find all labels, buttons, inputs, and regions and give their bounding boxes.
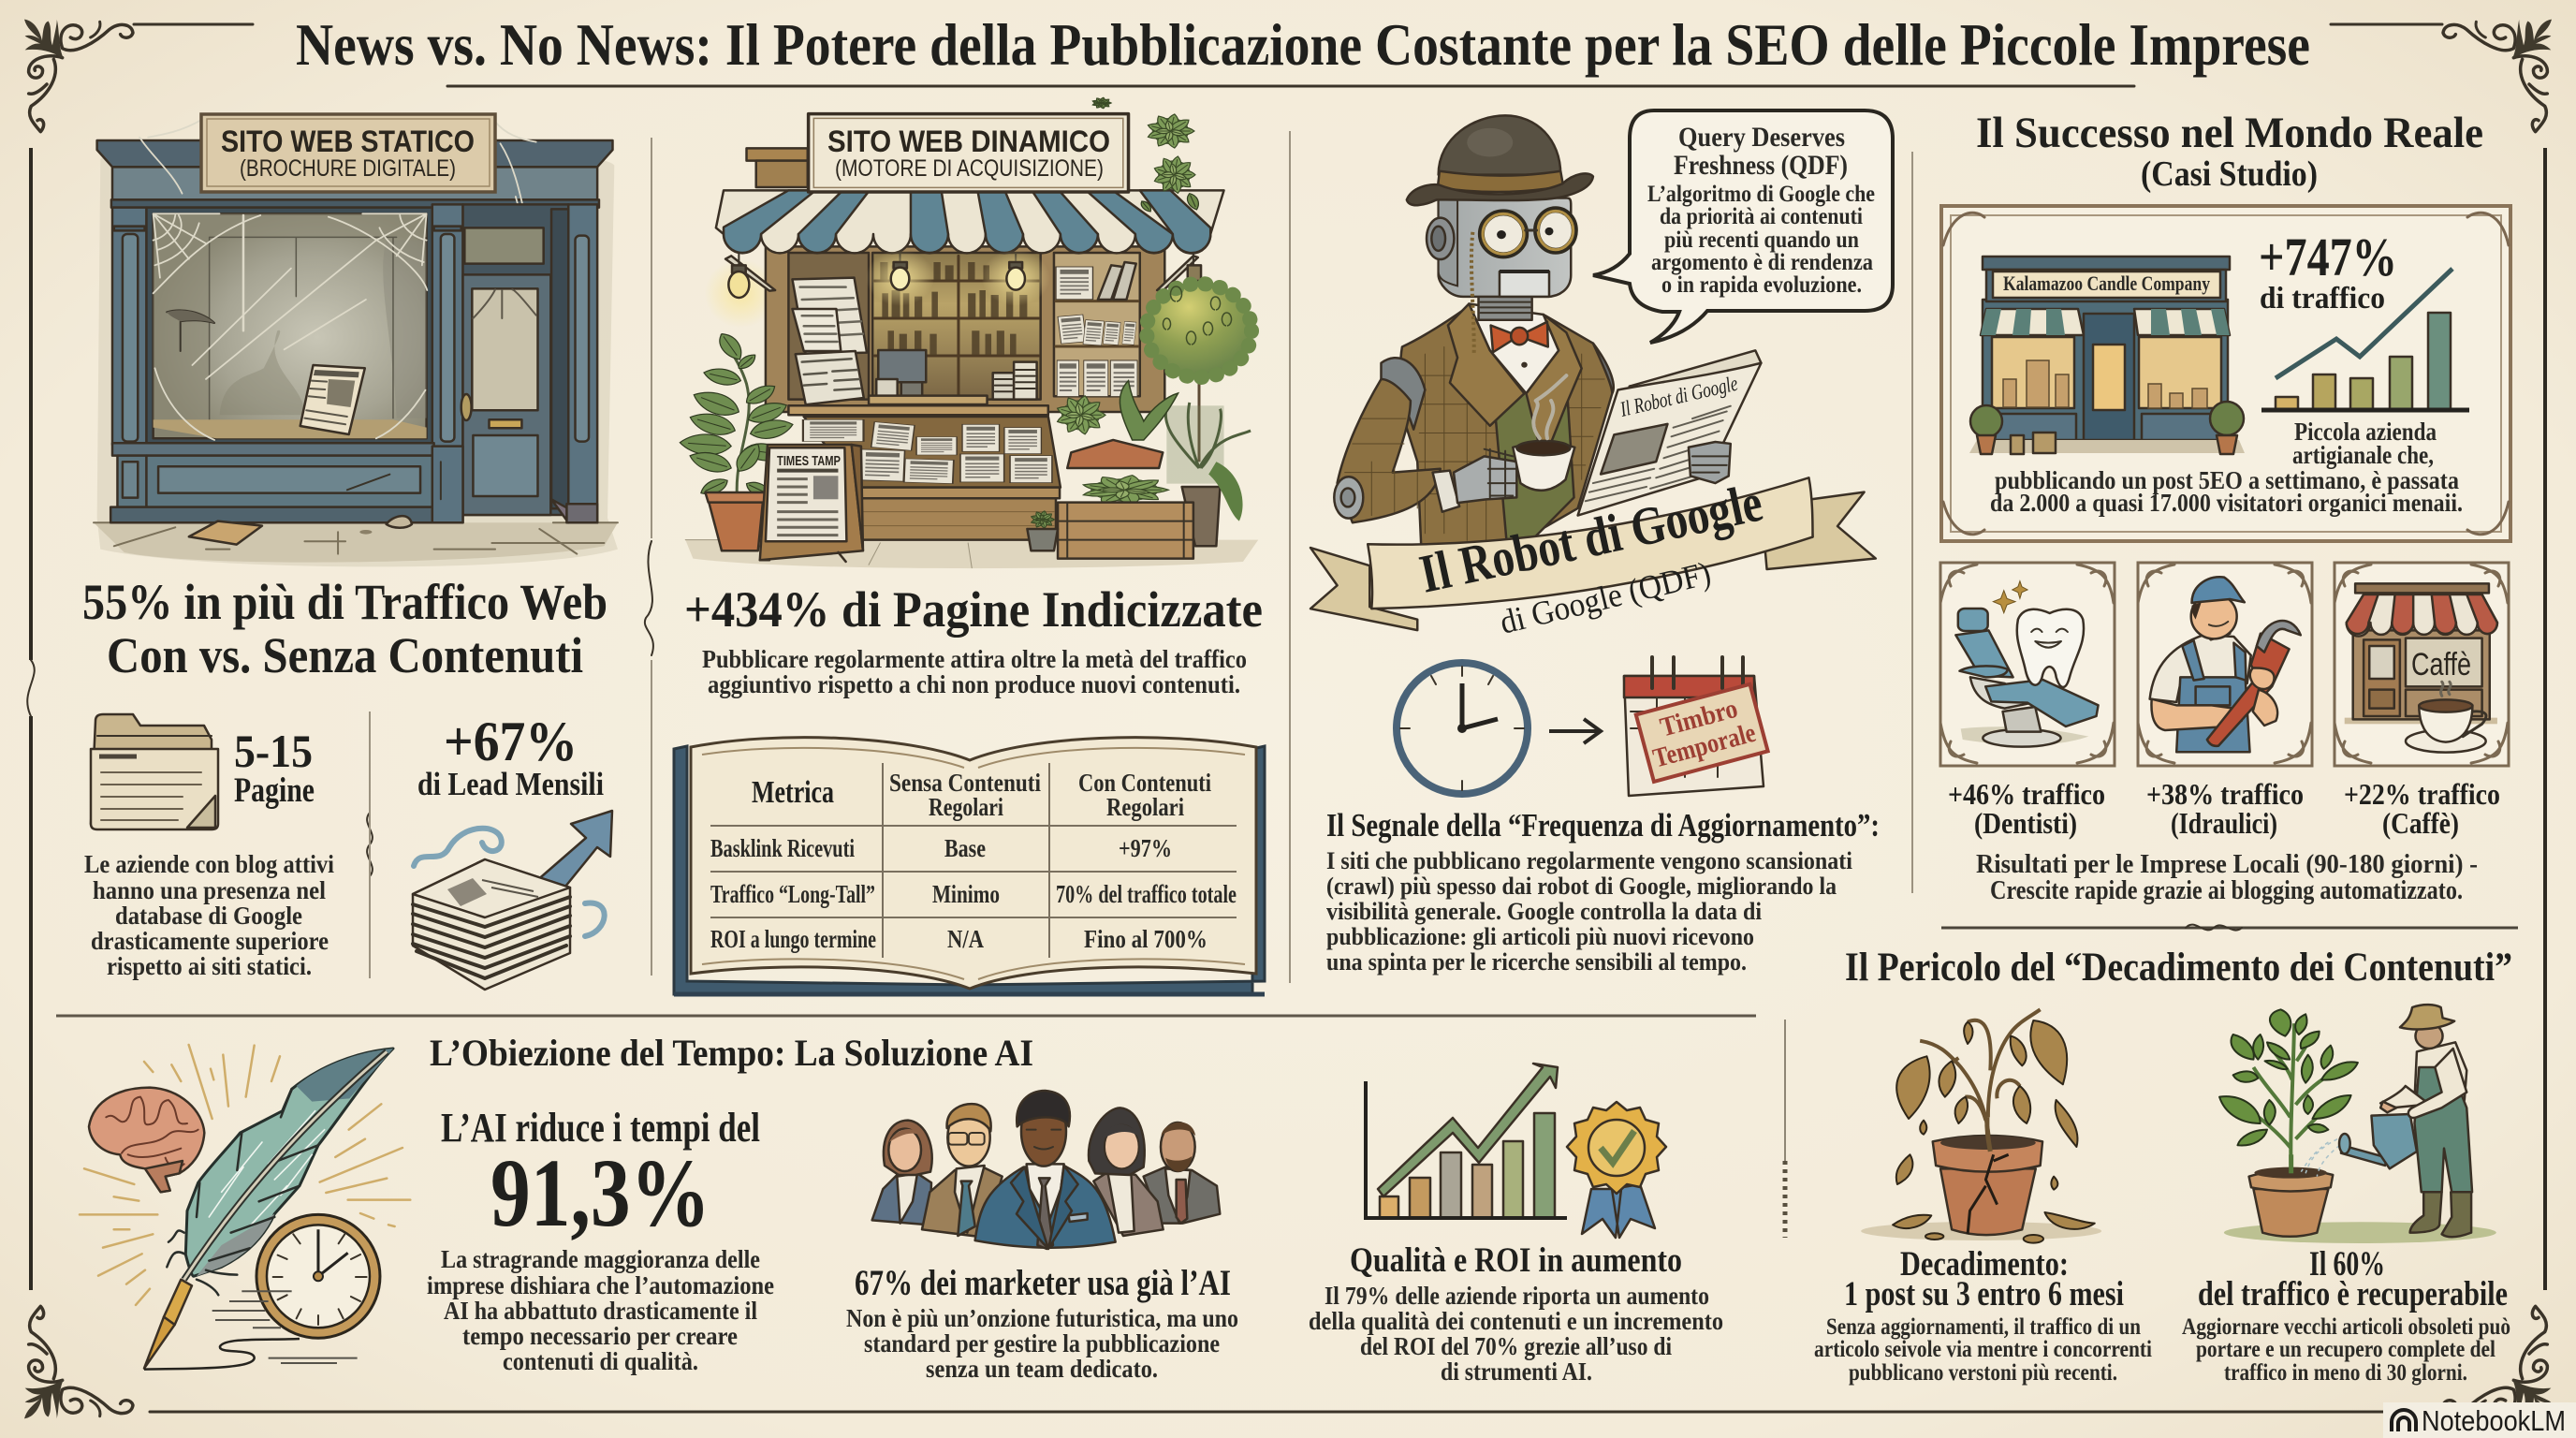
callout: QDF speech bubble — [1593, 110, 1893, 343]
panel: dynamic website — [674, 97, 1265, 994]
table rows: Traffico “Long-Tall” — [710, 880, 875, 908]
text: local business results — [1976, 850, 2478, 905]
icon: calendar with timestamp — [1624, 657, 1768, 796]
text: recovery explanation: portare e un recupero complete del — [2196, 1337, 2496, 1362]
sign: static website: (BROCHURE DIGITALE) — [240, 155, 456, 182]
illustration: group of marketers — [872, 1091, 1220, 1249]
text: kalamazoo result: Piccola azienda — [2294, 418, 2437, 446]
text: quality and ROI: della qualità dei contenuti e un incremento — [1309, 1307, 1723, 1335]
heading: real world success — [1976, 109, 2483, 194]
stat: recoverable — [2198, 1245, 2508, 1313]
text: automation — [427, 1245, 774, 1375]
panel: static website — [82, 114, 618, 990]
label: newspaper headline: Il Robot di Google — [1617, 372, 1740, 421]
title: News vs. No News: Il Potere della Pubblicazione Costante per la SEO delle Piccole Imprese — [296, 12, 2310, 78]
icon: calendar with timestamp: Timbro — [1657, 694, 1741, 742]
heading: 55% traffic: Con vs. Senza Contenuti — [107, 627, 583, 683]
illustration: robot reading newspaper — [1310, 115, 1876, 630]
labels: sector results — [1948, 777, 2500, 840]
text: AI standard: standard per gestire la pubblicazione — [864, 1329, 1220, 1357]
text: automation: La stragrande maggioranza delle — [441, 1245, 760, 1273]
illustration: candle shop: Kalamazoo Candle Company — [2003, 271, 2210, 295]
text: update frequency: una spinta per le ricerche sensibili al tempo. — [1326, 948, 1747, 976]
icon: quality medal — [1567, 1102, 1666, 1238]
table rows: +97% — [1119, 834, 1172, 862]
table rows — [710, 834, 1237, 953]
text: update frequency — [1326, 847, 1852, 976]
stat: +67% leads: +67% — [444, 711, 578, 772]
table rows: N/A — [947, 925, 984, 953]
text: blog presence: rispetto ai siti statici. — [107, 952, 312, 980]
heading: quality and ROI: Qualità e ROI in aumento — [1350, 1241, 1682, 1280]
text: update frequency: pubblicazione: gli articoli più nuovi ricevono — [1326, 923, 1754, 950]
text: automation: contenuti di qualità. — [503, 1347, 698, 1375]
label: times tamp board: TIMES TAMP — [777, 453, 841, 469]
illustration: busy newsstand — [685, 114, 1258, 568]
panel: case studies — [1940, 109, 2510, 905]
icon: paper stack with arrow — [413, 811, 612, 990]
stat: +67% leads: di Lead Mensili — [417, 766, 604, 802]
illustration: gardener watering plant — [2219, 1005, 2496, 1243]
stat: 5-15 pagine — [234, 725, 315, 810]
text: blog presence: drasticamente superiore — [91, 927, 329, 955]
card: cafe — [2334, 563, 2509, 766]
stat: decay: 1 post su 3 entro 6 mesi — [1844, 1275, 2124, 1313]
text: kalamazoo result: pubblicando un post 5EO a settimano, è passata — [1995, 466, 2459, 494]
stat: recoverable: Il 60% — [2309, 1245, 2385, 1284]
chart: quality and ROI — [1366, 1064, 1567, 1218]
text: recovery explanation — [2182, 1314, 2510, 1386]
text: regular publishing: aggiuntivo rispetto a chi non produce nuovi contenuti. — [708, 670, 1240, 698]
chart: traffic growth — [2261, 269, 2469, 410]
table rows: 70% del traffico totale — [1056, 880, 1237, 908]
sign: dynamic website: SITO WEB DINAMICO — [827, 125, 1110, 158]
text: local business results: Crescite rapide grazie ai blogging automatizzato. — [1990, 876, 2463, 905]
labels: sector results: +22% traffico — [2344, 777, 2500, 811]
heading: time objection: L’Obiezione del Tempo: La Soluzione AI — [430, 1032, 1033, 1074]
table header: Sensa Contenuti — [889, 769, 1041, 797]
stat: +747% traffic: +747% — [2259, 227, 2397, 287]
table: open book — [674, 738, 1265, 994]
callout: QDF speech bubble: Query Deserves — [1678, 122, 1845, 153]
text: decay explanation: pubblicano verstoni più recenti. — [1849, 1360, 2117, 1386]
callout: QDF speech bubble: da priorità ai contenuti — [1660, 204, 1863, 229]
card: cafe: Caffè — [2411, 647, 2471, 682]
panel: content decay — [1814, 946, 2512, 1386]
text: local business results: Risultati per le Imprese Locali (90-180 giorni) - — [1976, 850, 2478, 879]
table header — [752, 769, 1211, 821]
stat: 91.3% time reduction: 91,3% — [490, 1139, 710, 1247]
text: decay explanation: articolo seivole via mentre i concorrenti — [1814, 1337, 2152, 1362]
icon: calendar with timestamp: Temporale — [1650, 718, 1759, 774]
labels: sector results: +46% traffico — [1948, 777, 2105, 811]
heading: +434%: +434% di Pagine Indicizzate — [684, 581, 1263, 638]
stat: decay: Decadimento: — [1900, 1245, 2069, 1284]
heading: real world success: Il Successo nel Mondo Reale — [1976, 109, 2483, 157]
arrow: clock to calendar — [1549, 719, 1601, 743]
stat: 5-15 pagine: Pagine — [234, 771, 315, 810]
labels: sector results: (Idraulici) — [2171, 806, 2277, 840]
text: regular publishing — [702, 645, 1247, 698]
text: quality and ROI: Il 79% delle aziende riporta un aumento — [1325, 1282, 1709, 1310]
table header: Regolari — [929, 793, 1003, 821]
table header: Regolari — [1106, 793, 1184, 821]
illustration: wilted plant — [1861, 1009, 2101, 1243]
table header: Con Contenuti — [1078, 769, 1211, 797]
text: AI standard — [846, 1304, 1238, 1383]
stat: recoverable: del traffico è recuperabile — [2198, 1275, 2508, 1313]
text: blog presence: Le aziende con blog attivi — [84, 850, 334, 878]
table rows: Base — [944, 834, 986, 862]
callout: QDF speech bubble: o in rapida evoluzione. — [1661, 272, 1862, 298]
illustration: newsstand plants — [679, 97, 1251, 562]
text: kalamazoo result: da 2.000 a quasi 17.000 visitatori organici menaii. — [1990, 489, 2463, 517]
text: kalamazoo result — [1990, 418, 2463, 517]
text: recovery explanation: Aggiornare vecchi articoli obsoleti può — [2182, 1314, 2510, 1340]
text: automation: AI ha abbattuto drasticamente il — [444, 1297, 757, 1325]
callout: QDF speech bubble: più recenti quando un — [1664, 227, 1859, 253]
table rows: Basklink Ricevuti — [710, 834, 855, 862]
text: blog presence — [84, 850, 334, 980]
text: AI standard: senza un team dedicato. — [926, 1355, 1158, 1383]
panel: google robot — [1310, 110, 1893, 976]
card: dentists — [1940, 563, 2115, 766]
stat: +747% traffic: di traffico — [2260, 282, 2385, 315]
text: update frequency: I siti che pubblicano regolarmente vengono scansionati — [1326, 847, 1852, 874]
text: blog presence: hanno una presenza nel — [93, 876, 326, 904]
text: quality and ROI: di strumenti AI. — [1441, 1357, 1592, 1386]
heading: update frequency signal: Il Segnale della “Frequenza di Aggiornamento”: — [1326, 807, 1880, 844]
table rows: ROI a lungo termine — [710, 925, 876, 953]
sign: dynamic website: (MOTORE DI ACQUISIZIONE) — [835, 155, 1104, 182]
labels: sector results: +38% traffico — [2146, 777, 2304, 811]
subtitle: di google (QDF): di Google (QDF) — [1496, 554, 1714, 641]
text: AI standard: Non è più un’onzione futuristica, ma uno — [846, 1304, 1238, 1332]
text: kalamazoo result: artigianale che, — [2292, 441, 2434, 469]
heading: 55% traffic: 55% in più di Traffico Web — [82, 574, 607, 630]
illustration: brain, quill and clock — [80, 1045, 410, 1370]
table header: Metrica — [752, 775, 834, 810]
stat: 5-15 pagine: 5-15 — [234, 725, 313, 777]
text: update frequency: (crawl) più spesso dai robot di Google, migliorando la — [1326, 873, 1837, 900]
callout: QDF speech bubble: Freshness (QDF) — [1674, 150, 1848, 181]
stat: +67% leads — [417, 711, 604, 802]
text: automation: tempo necessario per creare — [462, 1322, 738, 1350]
section dividers — [56, 131, 2518, 1238]
table rows: Minimo — [932, 880, 1000, 908]
text: decay explanation — [1814, 1314, 2152, 1386]
heading: 67% of marketers: 67% dei marketer usa già l’AI — [855, 1263, 1231, 1303]
stat: +747% traffic — [2259, 227, 2397, 315]
illustration: abandoned storefront — [94, 120, 618, 566]
card: kalamazoo candle company — [1941, 206, 2510, 541]
heading: real world success: (Casi Studio) — [2141, 154, 2318, 194]
labels: sector results: (Dentisti) — [1974, 806, 2077, 840]
sign: static website — [201, 114, 495, 192]
stat: 91.3% time reduction: L’AI riduce i tempi del — [441, 1105, 760, 1151]
icon: topiary tree crown — [1147, 284, 1251, 377]
icon: wall clock — [1397, 663, 1528, 794]
sign: dynamic website — [827, 125, 1110, 182]
panel: AI solution — [80, 1032, 1723, 1386]
text: update frequency: visibilità generale. Google controlla la data di — [1326, 898, 1762, 925]
text: decay explanation: Senza aggiornamenti, il traffico di un — [1826, 1314, 2141, 1340]
text: quality and ROI — [1309, 1282, 1723, 1386]
icon: folder — [91, 714, 218, 829]
stat: decay — [1844, 1245, 2124, 1313]
card: plumbers — [2138, 563, 2312, 766]
text: recovery explanation: traffico in meno di 30 glorni. — [2224, 1360, 2467, 1386]
banner text: il robot di google: Il Robot di Google — [1414, 472, 1767, 605]
text: quality and ROI: del ROI del 70% grezie all’uso di — [1360, 1332, 1672, 1360]
heading: 55% traffic — [82, 574, 607, 683]
stat: 91.3% time reduction — [441, 1105, 760, 1247]
labels: sector results: (Caffè) — [2382, 806, 2459, 840]
table rows: Fino al 700% — [1084, 925, 1208, 953]
callout: QDF speech bubble: L’algoritmo di Google che — [1647, 182, 1875, 207]
illustration: candle shop — [1969, 257, 2245, 454]
text: automation: imprese dishiara che l’automazione — [427, 1271, 774, 1299]
sign: static website: SITO WEB STATICO — [221, 125, 475, 158]
callout: QDF speech bubble: argomento è di rendenza — [1651, 250, 1873, 275]
text: regular publishing: Pubblicare regolarmente attira oltre la metà del traffico — [702, 645, 1247, 673]
text: blog presence: database di Google — [115, 902, 302, 930]
